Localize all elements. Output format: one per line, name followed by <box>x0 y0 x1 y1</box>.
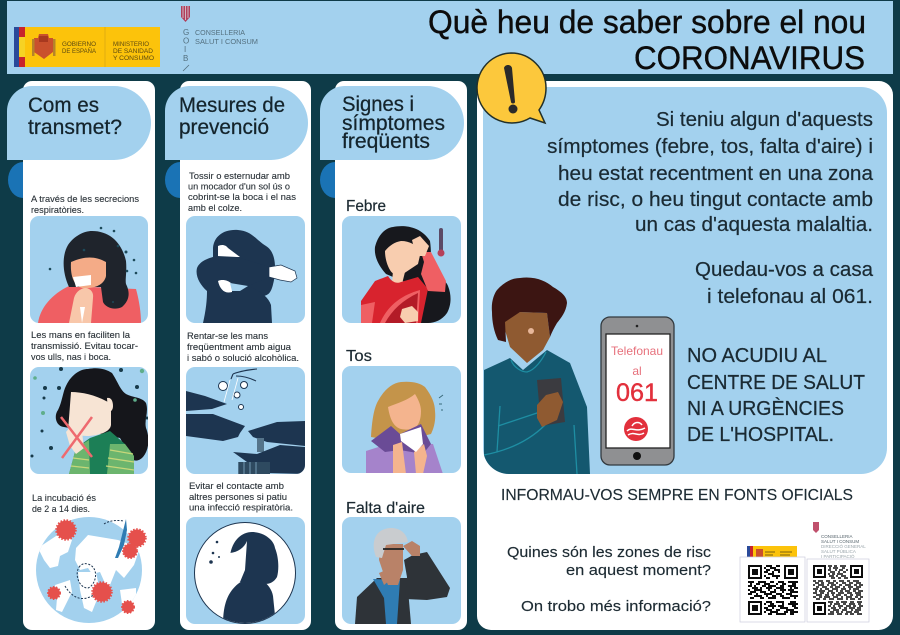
logo: conselleria small: I PARTICIPACIÓ <box>821 553 855 559</box>
logo: Gobierno de España: DE SANIDAD <box>113 48 153 55</box>
heading: prevenció <box>179 115 269 139</box>
text: rentar: freqüentment amb aigua <box>187 342 292 353</box>
text: do not go to health centre: NO ACUDIU AL <box>687 345 827 367</box>
text: evitar: una infecció respiratòria. <box>189 502 293 514</box>
text: tossir: Tossir o esternudar amb <box>189 171 290 182</box>
text: evitar <box>189 481 293 514</box>
text: incubació: de 2 a 14 dies. <box>32 504 90 515</box>
label: Tos: Tos <box>346 348 372 365</box>
icon: phone showing 061 <box>601 317 674 465</box>
heading <box>28 93 122 139</box>
text: tossir <box>188 171 296 214</box>
title <box>428 4 866 76</box>
illustration: man with phone <box>484 278 590 474</box>
panel: Com es transmet <box>7 81 155 630</box>
text: secrecions <box>31 194 139 216</box>
text: symptoms warning <box>547 108 874 236</box>
text: stay home: Quedau-vos a casa <box>695 258 874 281</box>
heading: Mesures de <box>179 93 285 117</box>
heading: transmet? <box>28 115 122 139</box>
illustration: avoid contact <box>186 517 305 625</box>
text: mans: transmissió. Evitau tocar- <box>31 341 138 352</box>
logo: Gobierno de España <box>14 27 160 67</box>
logo: conselleria small: DIRECCIÓ GENERAL <box>821 543 866 549</box>
illustration: coughing into elbow <box>186 216 305 323</box>
logo: Gobierno de España: GOBIERNO <box>62 41 96 48</box>
text: evitar: altres persones si patiu <box>189 492 287 503</box>
panel: Signes i símptomes <box>320 81 467 630</box>
text: do not go to health centre <box>687 345 865 446</box>
heading: freqüents <box>342 129 430 153</box>
text: incubació: La incubació és <box>32 493 96 504</box>
heading <box>179 93 285 139</box>
label: Falta d'aire: Falta d'aire <box>346 500 425 517</box>
text: mans: Les mans en faciliten la <box>31 330 131 341</box>
text: evitar: Evitar el contacte amb <box>189 481 284 492</box>
text: secrecions: respiratòries. <box>31 205 84 216</box>
logo: GOIB Conselleria Salut i Consum: O <box>183 36 189 46</box>
logo: conselleria small: CONSELLERIA <box>821 534 853 539</box>
logo: GOIB Conselleria Salut i Consum <box>181 6 258 71</box>
logo: conselleria small <box>813 522 866 559</box>
icon: exclamation speech bubble <box>477 53 546 123</box>
text: tossir: un mocador d'un sol ús o <box>188 182 290 192</box>
logo: GOIB Conselleria Salut i Consum: I <box>184 45 186 54</box>
heading: Com es <box>28 93 99 117</box>
logo: ministry small <box>747 546 797 560</box>
text: rentar <box>187 331 299 364</box>
text: do not go to health centre: DE L'HOSPITAL. <box>687 424 834 446</box>
text: symptoms warning: Si teniu algun d'aquests <box>656 108 873 131</box>
logo: Gobierno de España: MINISTERIO <box>113 41 149 48</box>
text: stay home: i telefonau al 061. <box>707 285 873 308</box>
text: tossir: amb el colze. <box>188 203 242 214</box>
illustration: washing hands <box>186 367 305 474</box>
title: CORONAVIRUS <box>634 40 865 76</box>
logo: Gobierno de España: DE ESPAÑA <box>62 46 97 55</box>
text: secrecions: A través de les secrecions <box>31 194 139 205</box>
QR code 1 <box>740 557 805 622</box>
illustration: woman touching face <box>30 367 148 474</box>
logo: GOIB Conselleria Salut i Consum: SALUT I CONSUM <box>195 37 258 46</box>
text: questions: On trobo més informació? <box>521 598 711 615</box>
text: questions <box>507 544 712 615</box>
text: questions: Quines són les zones de risc <box>507 544 712 561</box>
heading: símptomes <box>342 111 445 135</box>
text: do not go to health centre: CENTRE DE SALUT <box>687 372 865 394</box>
panel: main message <box>477 53 893 630</box>
text: tossir: cobrint-se la boca i el nas <box>188 192 296 203</box>
logo: GOIB Conselleria Salut i Consum: CONSELLERIA <box>195 28 245 37</box>
text: symptoms warning: heu estat recentment en una zona <box>558 162 874 185</box>
text: symptoms warning: símptomes (febre, tos, falta d'aire) i <box>547 135 873 158</box>
text: mans <box>31 330 138 363</box>
icon: phone showing 061: 061 <box>616 379 658 407</box>
logo: GOIB Conselleria Salut i Consum: G <box>183 28 189 37</box>
logo: GOIB Conselleria Salut i Consum: B <box>183 54 188 63</box>
logo: conselleria small: SALUT PÚBLICA <box>821 548 856 554</box>
heading: Signes i <box>342 92 414 116</box>
illustration: globe with virus <box>36 517 146 623</box>
text: do not go to health centre: NI A URGÈNCIES <box>687 397 844 420</box>
icon: phone showing 061: al <box>632 364 642 378</box>
text: stay home <box>695 258 874 308</box>
text: incubació <box>32 493 96 515</box>
text: symptoms warning: de risc, o heu tingut contacte amb <box>558 188 873 211</box>
text: rentar: Rentar-se les mans <box>187 331 268 342</box>
text: official sources: INFORMAU-VOS SEMPRE EN FONTS OFICIALS <box>501 487 853 504</box>
illustration: fever <box>342 216 461 323</box>
icon: phone showing 061: Telefonau <box>611 344 663 358</box>
illustration: woman sneezing <box>30 216 148 323</box>
heading <box>342 92 445 153</box>
illustration: shortness of breath <box>342 517 461 624</box>
panel: Mesures de prevenció <box>165 81 311 630</box>
text: rentar: i sabó o solució alcohòlica. <box>187 353 299 364</box>
text: symptoms warning: un cas d'aquesta malaltia. <box>635 213 873 236</box>
logo: Gobierno de España: Y CONSUMO <box>113 55 154 62</box>
text: mans: vos ulls, nas i boca. <box>31 352 111 363</box>
title: Què heu de saber sobre el nou <box>428 4 866 40</box>
illustration: cough <box>342 366 461 474</box>
header band <box>7 1 893 76</box>
label: Febre: Febre <box>346 198 386 215</box>
QR code 2 <box>807 559 869 622</box>
logo: conselleria small: SALUT I CONSUM <box>821 539 859 544</box>
text: questions: en aquest moment? <box>566 562 711 579</box>
